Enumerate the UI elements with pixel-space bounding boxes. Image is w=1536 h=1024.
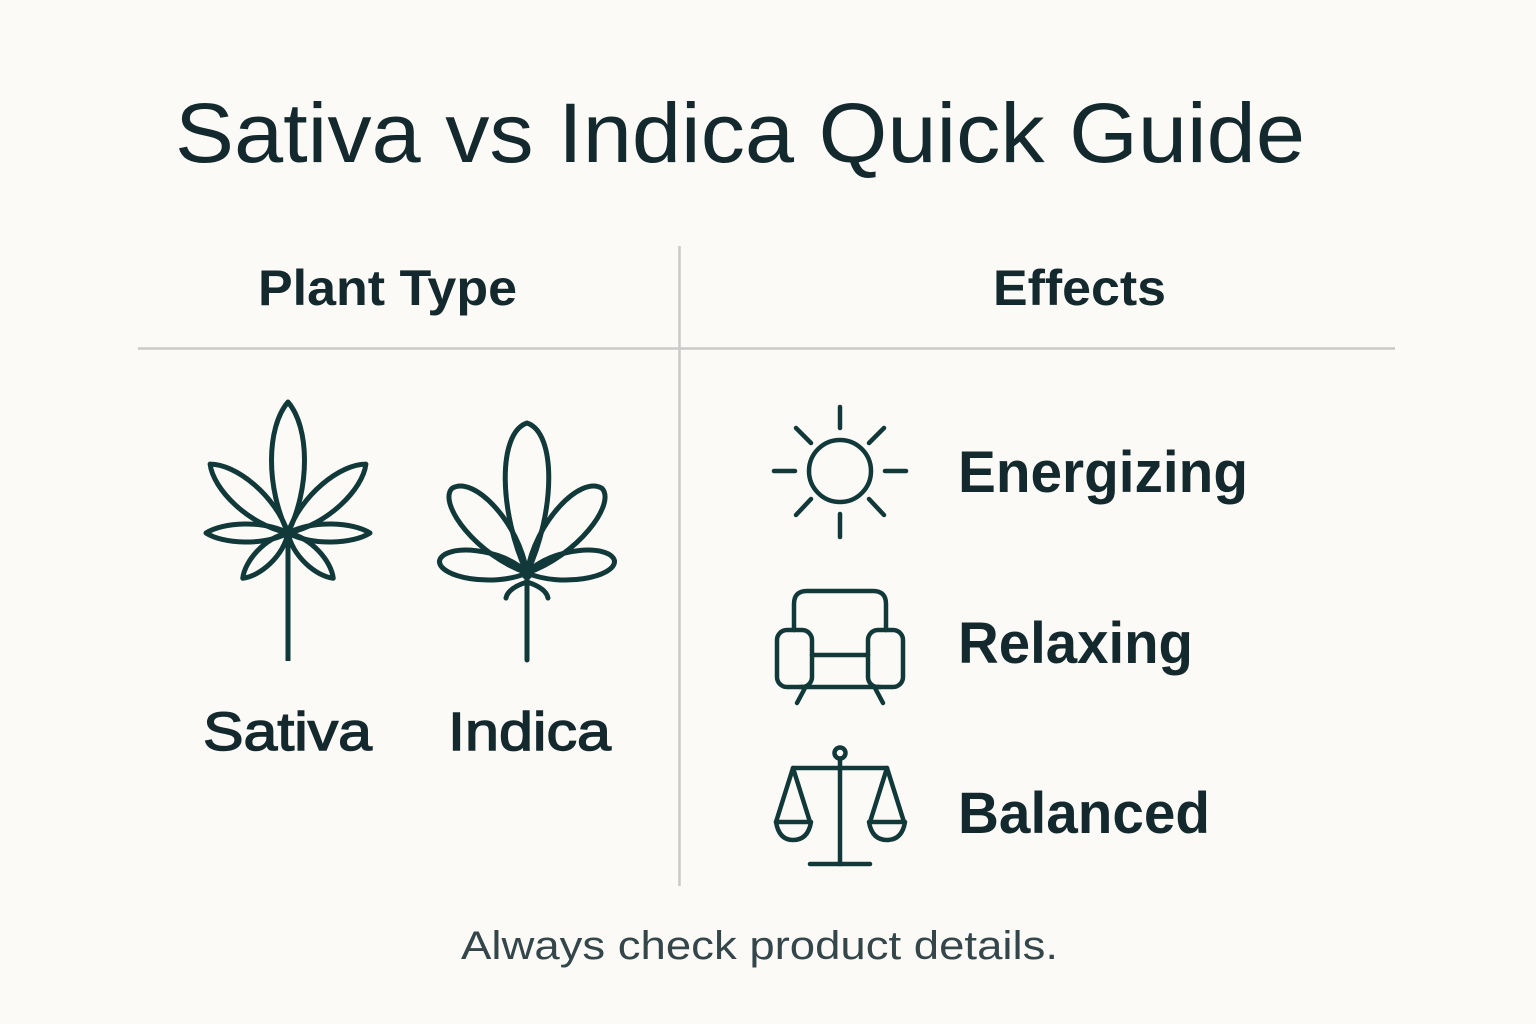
- label: indica: Indica: [448, 702, 612, 762]
- label: relaxing: Relaxing: [958, 611, 1193, 676]
- heading: effects: Effects: [993, 260, 1166, 316]
- title: Sativa vs Indica Quick Guide: [175, 86, 1305, 180]
- icon: scales: [776, 748, 905, 864]
- icon: indica leaf: [437, 423, 617, 660]
- icon: armchair: [777, 591, 903, 703]
- icon: sativa leaf: [201, 402, 375, 661]
- label: energizing: Energizing: [958, 440, 1248, 505]
- footer note: Always check product details.: [461, 924, 1058, 968]
- label: sativa: Sativa: [203, 702, 373, 762]
- icon: sun: [774, 407, 906, 537]
- label: balanced: Balanced: [958, 781, 1210, 846]
- heading: plant type: Plant Type: [258, 260, 517, 316]
